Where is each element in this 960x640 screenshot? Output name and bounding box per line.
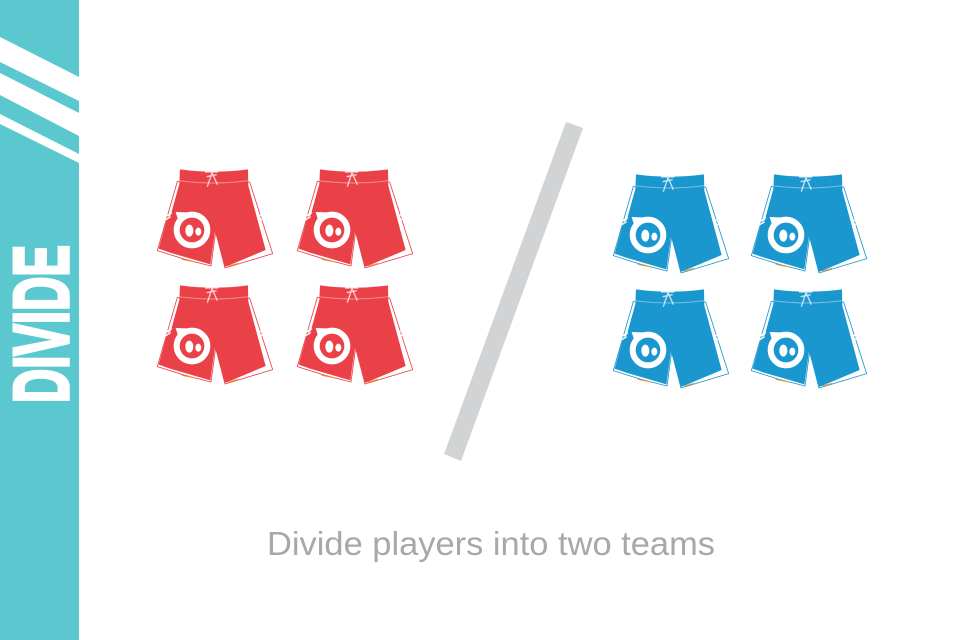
icon: red shorts bottom left	[157, 285, 273, 384]
caption: Divide players into two teams	[267, 525, 715, 562]
icon: red shorts top left	[157, 169, 273, 268]
icon: blue shorts top left	[613, 174, 729, 273]
icon: blue shorts bottom left	[613, 289, 729, 388]
red team shorts	[157, 169, 413, 384]
icon: red shorts top right	[297, 169, 413, 268]
icon: blue shorts top right	[751, 174, 867, 273]
sidebar panel	[0, 0, 79, 640]
icon: red shorts bottom right	[297, 285, 413, 384]
sidebar white diagonal stripes	[0, 37, 79, 163]
icon: blue shorts bottom right	[751, 289, 867, 388]
blue team shorts	[613, 174, 867, 388]
team divider slash	[444, 122, 583, 461]
